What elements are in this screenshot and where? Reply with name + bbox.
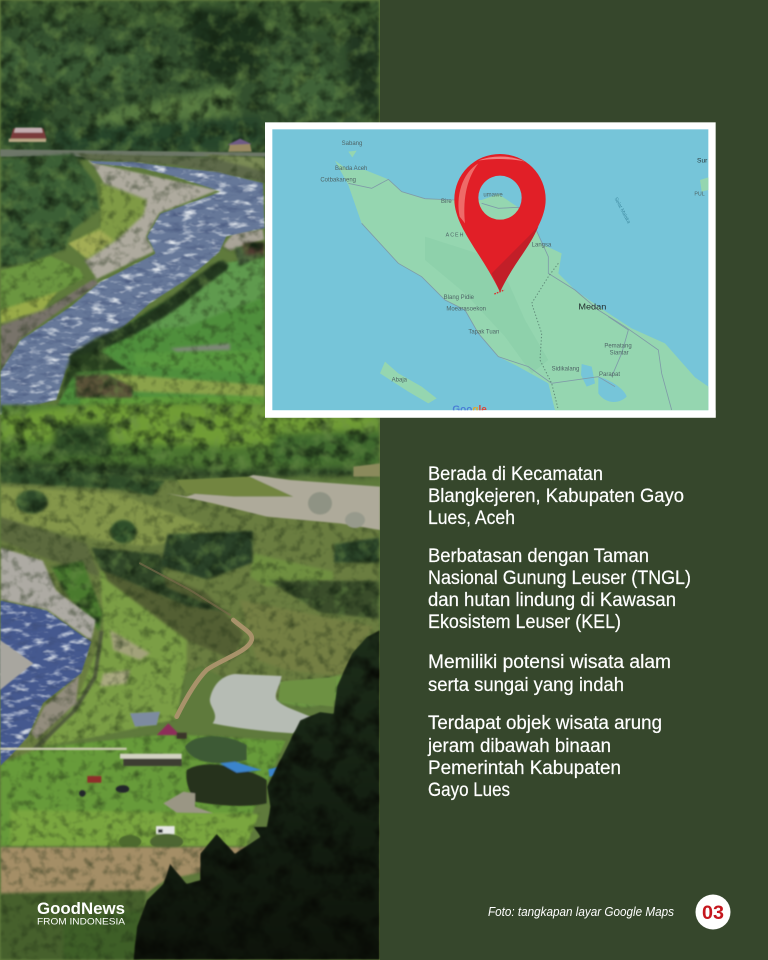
photo area: river with white rapids <box>0 161 265 415</box>
map: place labels <box>320 141 708 416</box>
map: place labels: Sidikalang <box>552 366 579 372</box>
fact: nature tourism <box>428 652 671 696</box>
fact: borders: Nasional Gunung Leuser (TNGL) <box>428 568 691 589</box>
logo: GoodNews from Indonesia: GoodNews <box>37 899 125 918</box>
photo area: lower river <box>0 600 92 767</box>
photo area: winding dirt road <box>140 563 252 717</box>
fact: location: Blangkejeren, Kabupaten Gayo <box>428 486 684 507</box>
page number badge: 03 <box>702 903 724 924</box>
panel: map with location pin <box>265 122 716 418</box>
fact: nature tourism: serta sungai yang indah <box>428 675 624 696</box>
map: sea and land <box>272 129 708 410</box>
photo area: valley meadows <box>0 477 380 847</box>
fact: borders: Ekosistem Leuser (KEL) <box>428 612 621 633</box>
photo area: left bank trees <box>0 153 100 268</box>
fact: rafting: jeram dibawah binaan <box>427 736 611 757</box>
photo area: band of bright trees <box>0 403 380 483</box>
fact: location <box>428 464 684 529</box>
photo area: dry brown field <box>0 847 257 960</box>
map: place labels: Sabang <box>342 141 362 147</box>
logo: GoodNews from Indonesia: FROM INDONESIA <box>37 916 126 928</box>
map: place labels: Cotbakaneng <box>320 178 356 184</box>
icon: red location pin <box>454 154 546 294</box>
fact: borders <box>428 546 691 633</box>
map: place labels: Google <box>452 405 487 416</box>
photo area: riverbanks, left trees, grass and gravel <box>0 153 267 373</box>
fact: nature tourism: Memiliki potensi wisata alam <box>428 652 671 673</box>
photo area: roadside houses <box>0 128 380 157</box>
frame mask under map <box>265 410 716 418</box>
fact: rafting: Terdapat objek wisata arung <box>428 713 662 734</box>
text block: location facts <box>427 464 691 801</box>
map: place labels: Abaja <box>392 378 408 384</box>
fact: location: Lues, Aceh <box>428 508 515 529</box>
fact: rafting <box>427 713 662 801</box>
map frame <box>265 122 716 418</box>
photo area: tree clusters in valley <box>0 463 380 708</box>
fact: borders: Berbatasan dengan Taman <box>428 546 649 567</box>
photo area: lower gravel bar <box>0 547 102 750</box>
map: place labels: Selat Malaka <box>613 196 632 225</box>
fact: rafting: Gayo Lues <box>428 780 510 801</box>
map: place labels: Blang Pidie <box>444 295 475 301</box>
page number badge <box>696 894 730 930</box>
photo area: gravel island in lower river <box>0 640 33 690</box>
map: place labels: PUL <box>694 191 705 197</box>
map: place labels: Tapak Tuan <box>468 330 499 336</box>
photo area: river tree line <box>57 242 265 403</box>
photo area: lower pond <box>210 674 337 733</box>
fact: borders: dan hutan lindung di Kawasan <box>428 590 676 611</box>
map: place labels: Parapat <box>599 372 620 378</box>
photo area: farm buildings, bridge and vehicles <box>0 712 293 850</box>
photo area: forest hillside <box>0 0 380 160</box>
photo area: upper pond <box>167 463 380 530</box>
photo area: dark pine trees in foreground <box>133 630 380 960</box>
fact: location: Berada di Kecamatan <box>428 464 603 485</box>
map: place labels: Pematang <box>604 344 632 350</box>
map: place labels: Banda Aceh <box>335 166 367 172</box>
map: place labels: Bire <box>441 199 452 205</box>
map: place labels: Siantar <box>610 351 629 357</box>
fact: rafting: Pemerintah Kabupaten <box>428 758 621 779</box>
map: place labels: umawe <box>483 192 503 198</box>
map: place labels: Langsa <box>532 243 552 249</box>
map: place labels: Sur <box>697 158 708 165</box>
map: place labels: Medan <box>578 301 607 311</box>
photo area: green rice fields <box>57 255 265 407</box>
map: place labels: Moearasoekon <box>446 306 486 312</box>
map: roads and borders <box>348 179 672 410</box>
logo: GoodNews from Indonesia <box>37 899 126 928</box>
map: place labels: ACEH <box>446 233 464 239</box>
